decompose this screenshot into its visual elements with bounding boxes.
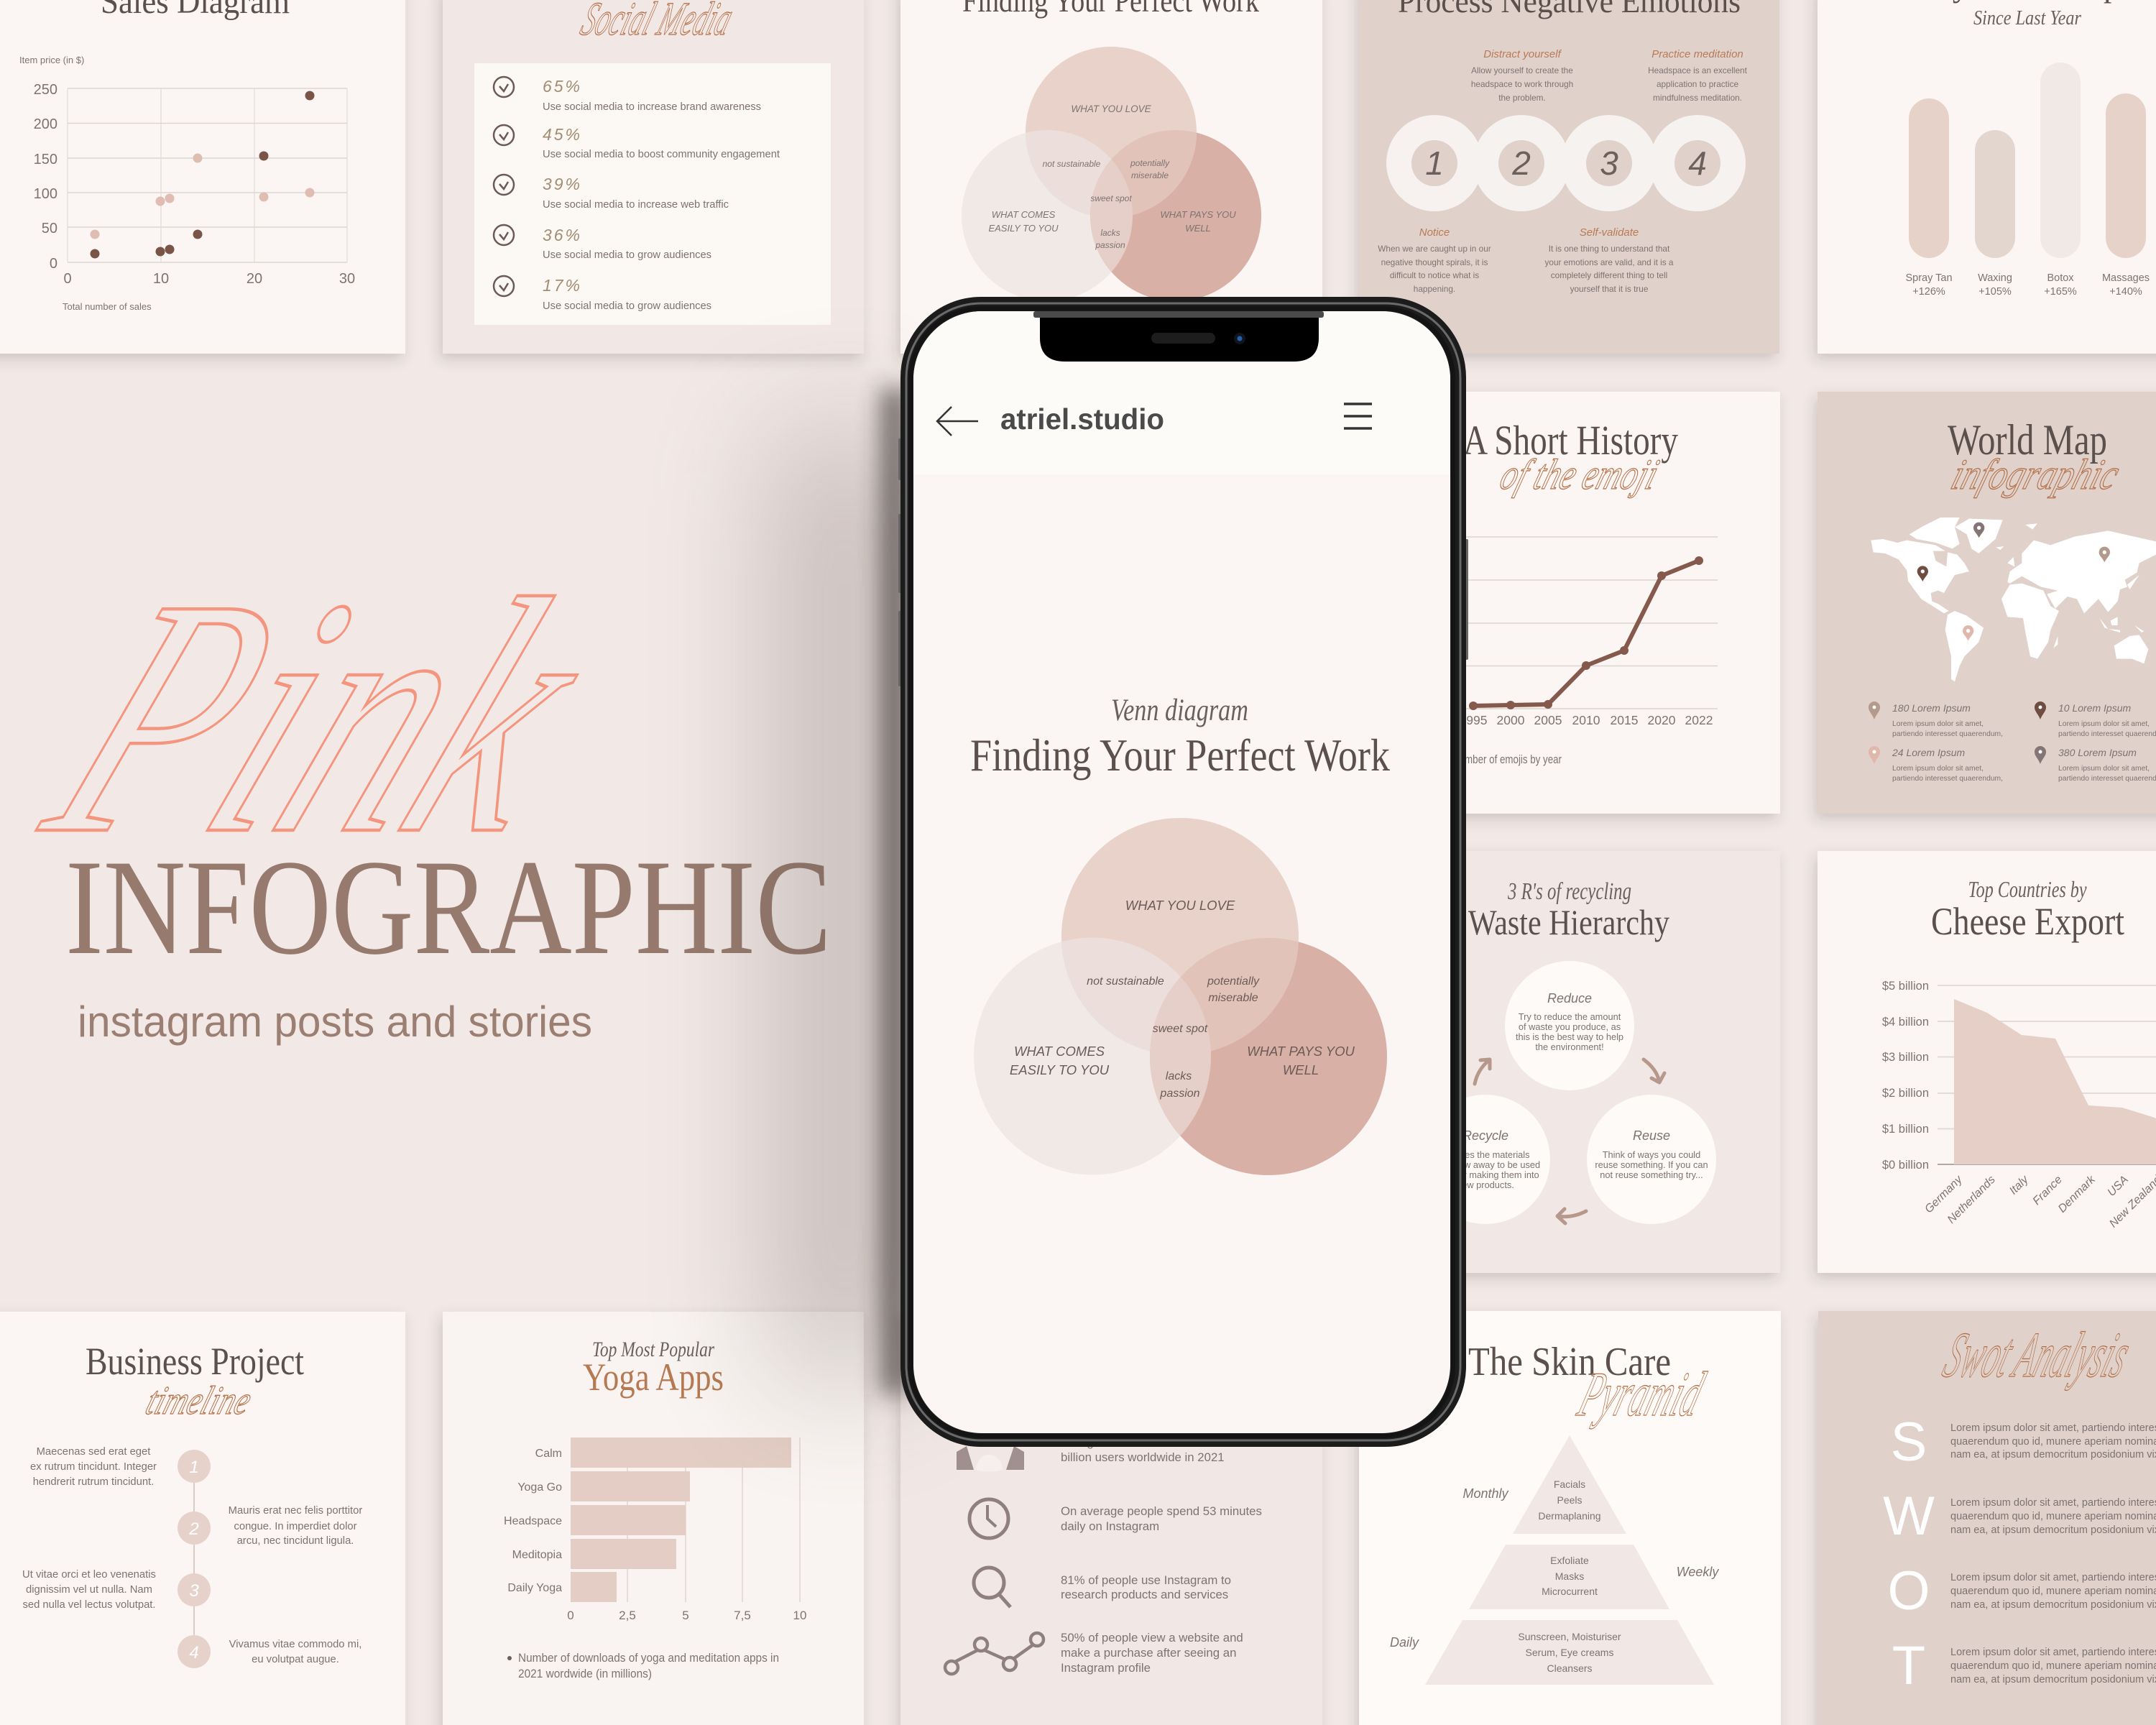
phone <box>898 297 1468 1447</box>
panel: small venn diagram <box>900 0 1322 354</box>
pyramid chart <box>1390 1435 1719 1685</box>
heading: the skin care: The Skin Care <box>1468 1340 1671 1384</box>
bar chart: Calm <box>535 1448 562 1460</box>
panel: beauty services bars <box>1818 0 2156 354</box>
cycle diagram: Try to reduce the amount <box>1519 1011 1621 1022</box>
panel: business project timeline <box>0 1312 405 1725</box>
area chart: Germany <box>1922 1173 1966 1215</box>
bar chart: 0 <box>567 1609 574 1622</box>
area chart: Italy <box>2007 1173 2032 1197</box>
small venn circles: passion <box>1095 240 1125 250</box>
venn diagram: sweet spot <box>1153 1023 1208 1035</box>
statistics text: 17% <box>543 276 580 295</box>
scatter chart: 200 <box>34 116 57 132</box>
area chart: $5 billion <box>1882 980 1929 993</box>
timeline: Maecenas sed erat eget <box>37 1446 150 1458</box>
script heading: timeline: timeline <box>141 1379 257 1423</box>
small venn circles: EASILY TO YOU <box>988 223 1059 234</box>
step text: completely different thing to tell <box>1551 270 1667 280</box>
scatter chart: 150 <box>34 152 57 167</box>
scatter chart: 30 <box>339 271 355 287</box>
scatter chart: 100 <box>34 186 57 202</box>
scatter chart: 0 <box>63 271 72 287</box>
bar chart: 2,5 <box>619 1609 636 1622</box>
heading: yoga apps: Yoga Apps <box>583 1356 724 1399</box>
bar chart <box>1905 63 2150 298</box>
step text: your emotions are valid, and it is a <box>1544 257 1674 267</box>
timeline: sed nulla vel lectus volutpat. <box>22 1599 156 1611</box>
scatter chart <box>19 55 355 312</box>
map legend: Lorem ipsum dolor sit amet, <box>2058 765 2150 773</box>
step text: mindfulness meditation. <box>1653 93 1742 103</box>
timeline: Ut vitae orci et leo venenatis <box>22 1569 156 1581</box>
panel: waste hierarchy <box>1359 851 1780 1273</box>
statistics text <box>543 77 780 312</box>
phone screen <box>913 311 1450 1433</box>
step text: When we are caught up in our <box>1378 244 1491 254</box>
phone frame <box>900 297 1466 1447</box>
statistics text <box>1061 1435 1262 1675</box>
cycle diagram: Enables the materials <box>1441 1149 1530 1160</box>
icon: clock <box>969 1499 1008 1538</box>
title: INFOGRAPHIC: INFOGRAPHIC <box>65 832 831 983</box>
bar chart: 7,5 <box>734 1609 751 1622</box>
panel: short history of the emoji <box>1359 392 1780 814</box>
scatter chart: 50 <box>42 221 57 236</box>
panel: swot analysis <box>1818 1311 2156 1725</box>
timeline: 3 <box>189 1581 199 1601</box>
line chart <box>1365 537 1718 766</box>
pyramid chart: Daily <box>1390 1635 1419 1650</box>
icon: search <box>974 1568 1010 1607</box>
pyramid chart: Monthly <box>1462 1486 1509 1501</box>
step text: difficult to notice what is <box>1390 270 1479 280</box>
cycle diagram: of waste you produce, as <box>1519 1021 1621 1032</box>
timeline: ex rutrum tincidunt. Integer <box>30 1461 157 1473</box>
line chart: 2020 <box>1648 713 1676 727</box>
swot letters: O <box>1887 1560 1930 1622</box>
step text: Headspace is an excellent <box>1648 65 1748 75</box>
map legend <box>1869 702 2156 783</box>
panel: social media <box>443 0 864 354</box>
note: 2021 wordwide (in millions) <box>518 1668 652 1680</box>
note: Number of downloads of yoga and meditation apps in <box>518 1652 779 1665</box>
venn diagram: lacks <box>1166 1070 1192 1082</box>
bar chart: 5 <box>682 1609 689 1622</box>
line chart: 2010 <box>1572 713 1600 727</box>
pyramid chart: Sunscreen, Moisturiser <box>1518 1631 1621 1642</box>
bar chart: +126% <box>1912 286 1945 298</box>
line chart: Number of emojis by year <box>1452 753 1562 766</box>
bar chart: +140% <box>2109 286 2142 298</box>
pyramid chart: Masks <box>1555 1570 1584 1582</box>
area chart: France <box>2031 1174 2065 1208</box>
timeline: 4 <box>189 1643 199 1662</box>
map legend: 10 Lorem Ipsum <box>2058 702 2131 714</box>
statistics text: Use social media to grow audiences <box>543 249 711 261</box>
area chart: Netherlands <box>1945 1174 1998 1226</box>
numbered circles: 1 <box>1425 144 1444 182</box>
area chart: $1 billion <box>1882 1123 1929 1136</box>
area chart: $0 billion <box>1882 1159 1929 1172</box>
step text: Allow yourself to create the <box>1471 65 1573 75</box>
bar chart: +105% <box>1978 286 2012 298</box>
venn diagram: potentially <box>1207 975 1260 988</box>
line chart: 2015 <box>1611 713 1638 727</box>
subheading: top most popular: Top Most Popular <box>592 1338 714 1361</box>
statistics text: 81% of people use Instagram to <box>1061 1573 1231 1587</box>
header: site name: atriel.studio <box>1000 402 1164 436</box>
cycle diagram: new products. <box>1457 1179 1514 1190</box>
bar chart: Meditopia <box>512 1549 562 1561</box>
script heading: pyramid: Pyramid <box>1570 1359 1713 1429</box>
panel: yoga apps <box>443 1312 864 1725</box>
cycle diagram: not reuse something try... <box>1600 1169 1703 1180</box>
note <box>507 1652 779 1680</box>
heading: business project: Business Project <box>86 1340 304 1383</box>
small venn circles: WHAT COMES <box>992 209 1056 220</box>
heading: world map: World Map <box>1948 416 2107 464</box>
statistics text: Instagram is estimated to have 1.35 <box>1061 1435 1252 1449</box>
step text: happening. <box>1414 284 1455 294</box>
small venn circles: WELL <box>1185 223 1211 234</box>
venn diagram: miserable <box>1208 992 1258 1004</box>
heading: finding your perfect work: Finding Your Perfect Work <box>970 730 1390 781</box>
numbered circles <box>1386 115 1746 211</box>
map legend: partiendo interesset quaerendum, <box>1892 730 2003 738</box>
phone shadow <box>776 388 913 1394</box>
pyramid chart: Weekly <box>1677 1565 1719 1579</box>
venn diagram: passion <box>1159 1087 1200 1100</box>
step text: application to practice <box>1657 79 1738 89</box>
cycle diagram: Reduce <box>1547 991 1592 1006</box>
swot letters: W <box>1883 1486 1935 1547</box>
venn diagram: WHAT YOU LOVE <box>1125 898 1235 913</box>
map legend: Lorem ipsum dolor sit amet, <box>1892 765 1984 773</box>
heading: waste hierarchy: Waste Hierarchy <box>1468 902 1669 942</box>
area chart: USA <box>2106 1174 2131 1199</box>
cycle diagram: again by making them into <box>1432 1169 1539 1180</box>
step text: negative thought spirals, it is <box>1381 257 1488 267</box>
panel: process negative emotions <box>1359 0 1779 354</box>
step text: the problem. <box>1498 93 1546 103</box>
cycle diagram: Think of ways you could <box>1603 1149 1700 1160</box>
pyramid chart: Cleansers <box>1547 1662 1593 1674</box>
statistics text: On average people spend 53 minutes <box>1061 1504 1262 1518</box>
pyramid chart: Serum, Eye creams <box>1526 1647 1613 1658</box>
statistics text: 39% <box>543 175 580 193</box>
panel: skin care pyramid <box>1359 1311 1781 1725</box>
bar chart: +165% <box>2044 286 2077 298</box>
timeline: Mauris erat nec felis porttitor <box>229 1505 362 1517</box>
scatter chart: Item price (in $) <box>19 55 84 65</box>
cycle diagram <box>1421 961 1716 1224</box>
step text: Notice <box>1419 226 1450 239</box>
small venn circles: WHAT YOU LOVE <box>1071 104 1152 114</box>
swot text: nam ea, at ipsum democritum posidonium vix <box>1950 1599 2156 1611</box>
map: world <box>1871 518 2156 681</box>
swot text: nam ea, at ipsum democritum posidonium vix <box>1950 1524 2156 1536</box>
panel: sales diagram <box>0 0 405 354</box>
small venn circles <box>962 47 1261 301</box>
scatter chart: Total number of sales <box>63 301 152 312</box>
icon: line chart <box>945 1633 1044 1674</box>
heading: cheese export: Cheese Export <box>1931 900 2124 943</box>
numbered circles: 2 <box>1511 144 1531 182</box>
phone side buttons <box>898 438 1468 686</box>
numbered circles: 3 <box>1600 144 1618 182</box>
swot text <box>1950 1422 2156 1685</box>
area chart: $3 billion <box>1882 1051 1929 1064</box>
statistics text: research products and services <box>1061 1588 1228 1601</box>
venn diagram: WELL <box>1283 1062 1319 1077</box>
map pins <box>1917 523 2110 641</box>
panel: cheese export <box>1818 851 2156 1273</box>
header: back arrow <box>937 407 978 436</box>
script heading: of the emoji: of the emoji <box>1495 451 1664 499</box>
timeline <box>22 1446 362 1668</box>
heading: beauty services <box>1883 0 2120 29</box>
step text: yourself that it is true <box>1570 284 1649 294</box>
bar chart: Yoga Go <box>517 1481 562 1494</box>
pyramid chart: Facials <box>1554 1478 1585 1490</box>
bar chart: Spray Tan <box>1905 272 1953 284</box>
timeline: 1 <box>189 1458 199 1477</box>
cycle diagram: reuse something. If you can <box>1595 1159 1708 1170</box>
map legend: 24 Lorem Ipsum <box>1892 747 1965 758</box>
small venn circles: WHAT PAYS YOU <box>1160 209 1236 220</box>
timeline: Vivamus vitae commodo mi, <box>229 1639 361 1650</box>
bar chart: Daily Yoga <box>507 1582 562 1594</box>
subtitle: instagram posts and stories <box>78 998 592 1046</box>
pyramid chart: Exfoliate <box>1550 1555 1589 1566</box>
map legend: Lorem ipsum dolor sit amet, <box>2058 720 2150 728</box>
scatter chart: 10 <box>153 271 169 287</box>
area chart: $4 billion <box>1882 1016 1929 1029</box>
scatter chart: 250 <box>34 82 57 98</box>
venn diagram: EASILY TO YOU <box>1010 1062 1110 1077</box>
subheading: venn diagram: Venn diagram <box>1111 694 1248 727</box>
map legend: 380 Lorem Ipsum <box>2058 747 2137 758</box>
statistics text: Use social media to increase web traffic <box>543 198 729 211</box>
cycle diagram: the environment! <box>1535 1041 1604 1052</box>
line chart: 1995 <box>1460 713 1487 727</box>
bar chart: Headspace <box>504 1515 562 1527</box>
timeline: eu volutpat augue. <box>252 1654 339 1665</box>
bar chart: Waxing <box>1978 272 2012 284</box>
scatter chart: 0 <box>50 256 57 272</box>
small venn circles: sweet spot <box>1090 193 1132 203</box>
heading: a short history: A Short History <box>1463 417 1678 464</box>
step text: Practice meditation <box>1651 48 1743 60</box>
statistics text: Use social media to increase brand awareness <box>543 101 761 113</box>
area chart: $2 billion <box>1882 1087 1929 1100</box>
cycle diagram: you throw away to be used <box>1431 1159 1540 1170</box>
pyramid chart: Peels <box>1557 1494 1583 1506</box>
statistics text: Instagram profile <box>1061 1661 1151 1675</box>
area chart <box>1882 980 2156 1230</box>
map legend: partiendo interesset quaerendum, <box>1892 775 2003 783</box>
bar chart: Botox <box>2047 272 2074 284</box>
statistics text: 36% <box>543 226 580 244</box>
cycle diagram: Reuse <box>1633 1128 1670 1143</box>
small venn circles: potentially <box>1130 158 1170 168</box>
step text: Distract yourself <box>1483 48 1562 60</box>
venn diagram: WHAT PAYS YOU <box>1247 1044 1355 1059</box>
statistics text: billion users worldwide in 2021 <box>1061 1450 1225 1464</box>
venn diagram: not sustainable <box>1087 975 1164 988</box>
venn diagram: WHAT COMES <box>1014 1044 1105 1059</box>
statistics text: 45% <box>543 125 580 144</box>
area chart: Denmark <box>2056 1173 2099 1215</box>
line chart: 2022 <box>1685 713 1713 727</box>
script title: Pink: Pink <box>1 529 645 903</box>
map legend: 180 Lorem Ipsum <box>1892 702 1971 714</box>
scatter chart: 20 <box>247 271 262 287</box>
step text: It is one thing to understand that <box>1549 244 1670 254</box>
pyramid chart: Dermaplaning <box>1538 1510 1601 1522</box>
step text: headspace to work through <box>1471 79 1573 89</box>
timeline: 2 <box>188 1519 199 1539</box>
statistics text: make a purchase after seeing an <box>1061 1646 1236 1660</box>
pyramid chart: Microcurrent <box>1542 1586 1598 1597</box>
timeline: dignissim vel ut nulla. Nam <box>26 1584 152 1596</box>
statistics text: daily on Instagram <box>1061 1519 1159 1533</box>
statistics text: 50% of people view a website and <box>1061 1631 1243 1644</box>
card: statistics list <box>474 63 831 325</box>
small venn circles: lacks <box>1100 228 1120 238</box>
panel: world map <box>1818 392 2156 814</box>
step text: Self-validate <box>1580 226 1639 239</box>
timeline: hendrerit rutrum tincidunt. <box>33 1476 154 1488</box>
small venn circles: not sustainable <box>1043 159 1101 169</box>
notch <box>1033 311 1324 362</box>
cycle diagram: this is the best way to help <box>1516 1031 1623 1042</box>
step text <box>1378 48 1748 294</box>
numbered circles: 4 <box>1688 144 1707 182</box>
swot text: nam ea, at ipsum democritum posidonium vix <box>1950 1449 2156 1460</box>
script heading: infographic: infographic <box>1946 451 2125 499</box>
bar chart <box>504 1438 806 1622</box>
statistics text: Use social media to grow audiences <box>543 300 711 312</box>
swot text: nam ea, at ipsum democritum posidonium vix <box>1950 1674 2156 1685</box>
statistics text: Use social media to boost community engagement <box>543 148 780 160</box>
venn diagram <box>974 818 1387 1175</box>
cycle diagram: Recycle <box>1462 1128 1508 1143</box>
swot letters: T <box>1892 1635 1925 1696</box>
line chart: 2005 <box>1534 713 1562 727</box>
icons: check circles <box>494 77 514 296</box>
header: menu icon <box>1344 404 1372 428</box>
subheading: top countries by: Top Countries by <box>1968 876 2087 902</box>
swot letters: S <box>1891 1412 1927 1473</box>
icon: people <box>957 1446 1024 1472</box>
timeline: congue. In imperdiet dolor <box>234 1521 357 1532</box>
statistics text: 65% <box>543 77 580 96</box>
line chart: 2000 <box>1497 713 1525 727</box>
bar chart: 10 <box>793 1609 806 1622</box>
small venn circles: miserable <box>1131 170 1169 180</box>
subheading: 3 R's of recycling: 3 R's of recycling <box>1507 878 1631 905</box>
map legend: Lorem ipsum dolor sit amet, <box>1892 720 1984 728</box>
arrows <box>1475 1059 1664 1223</box>
panel: instagram statistics <box>900 1312 1322 1725</box>
swot letters <box>1883 1412 1935 1696</box>
timeline: arcu, nec tincidunt ligula. <box>237 1535 354 1547</box>
bar chart: Massages <box>2102 272 2150 284</box>
subheading: since last year: Since Last Year <box>1973 6 2082 29</box>
